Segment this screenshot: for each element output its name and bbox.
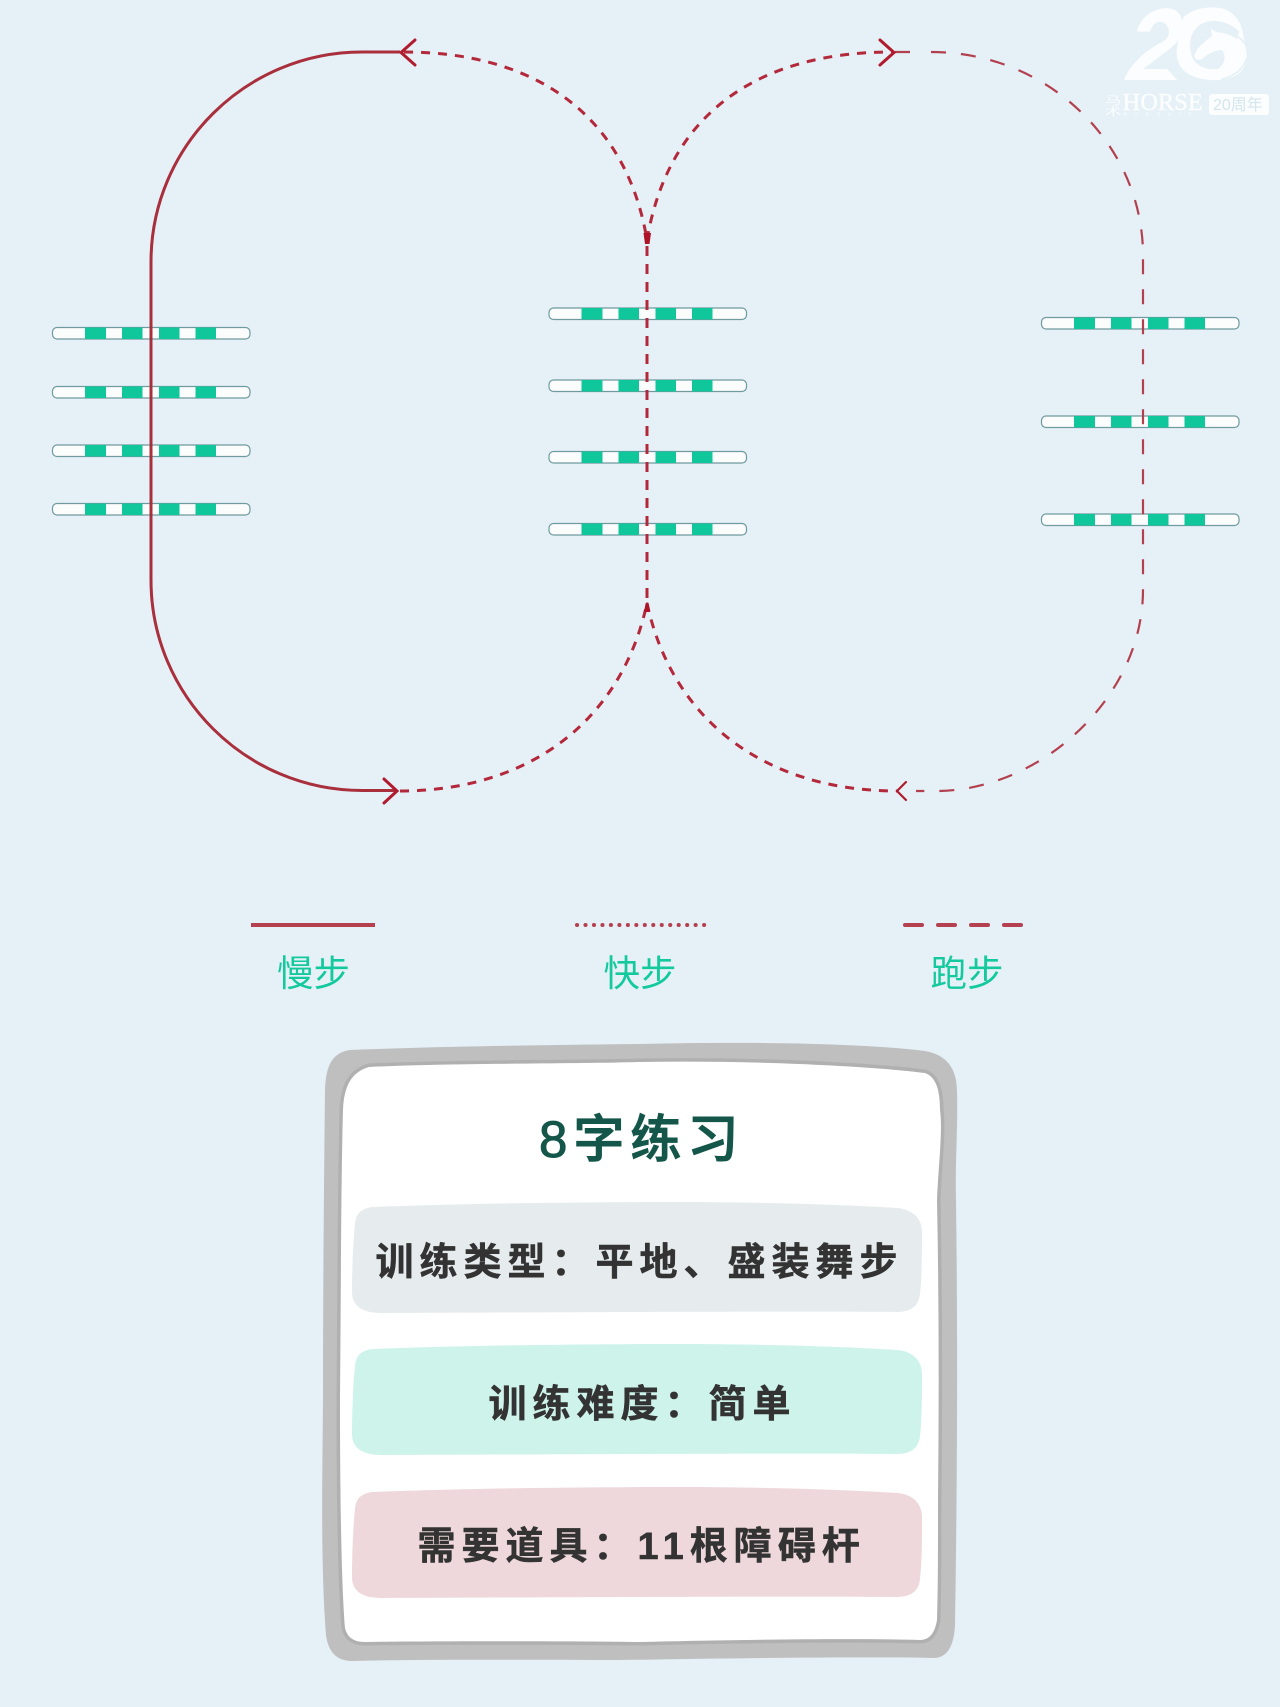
obstacle poles: left group [52, 328, 250, 515]
arrow: top right [880, 40, 894, 65]
obstacle poles: middle group [549, 308, 746, 535]
legend: trot [577, 925, 706, 994]
row: training type: 训练类型：平地、盛装舞步 [376, 1231, 904, 1286]
logo badge: 20周年: 20周年 [1213, 96, 1263, 114]
logo badge: 20周年 [1209, 94, 1269, 115]
logo wordmark: 术 [1105, 105, 1122, 117]
row: props: 需要道具：11根障碍杆 [418, 1515, 866, 1570]
row: training type [352, 1202, 922, 1313]
arrow: bottom left [384, 779, 397, 803]
route: canter dashed outer curve [895, 52, 1143, 791]
legend: canter [905, 925, 1022, 994]
route: trot dashed inner curves [400, 52, 897, 791]
arrow: bottom right [897, 782, 906, 800]
logo wordmark: MANSHIP [1123, 112, 1200, 116]
row: difficulty [352, 1344, 922, 1455]
legend: walk [251, 925, 375, 994]
logo: 20th anniversary Horsemanship [1105, 7, 1269, 117]
route: walk solid line [151, 52, 400, 790]
card title: 8字练习 [539, 1111, 744, 1168]
logo wordmark: 马 [1105, 94, 1122, 106]
legend: canter: 跑步 [930, 953, 1004, 994]
card frame [322, 1043, 957, 1661]
panel: training info card [322, 1043, 957, 1661]
logo wordmark: HORSE [1122, 89, 1203, 116]
card white interior [340, 1062, 941, 1642]
legend: trot: 快步 [604, 953, 676, 994]
obstacle poles: right group [1042, 318, 1239, 526]
row: difficulty: 训练难度：简单 [488, 1373, 797, 1428]
arrow: top left [401, 40, 415, 65]
legend: walk: 慢步 [277, 953, 350, 994]
row: props [352, 1487, 922, 1598]
central crossing markers [644, 233, 651, 612]
